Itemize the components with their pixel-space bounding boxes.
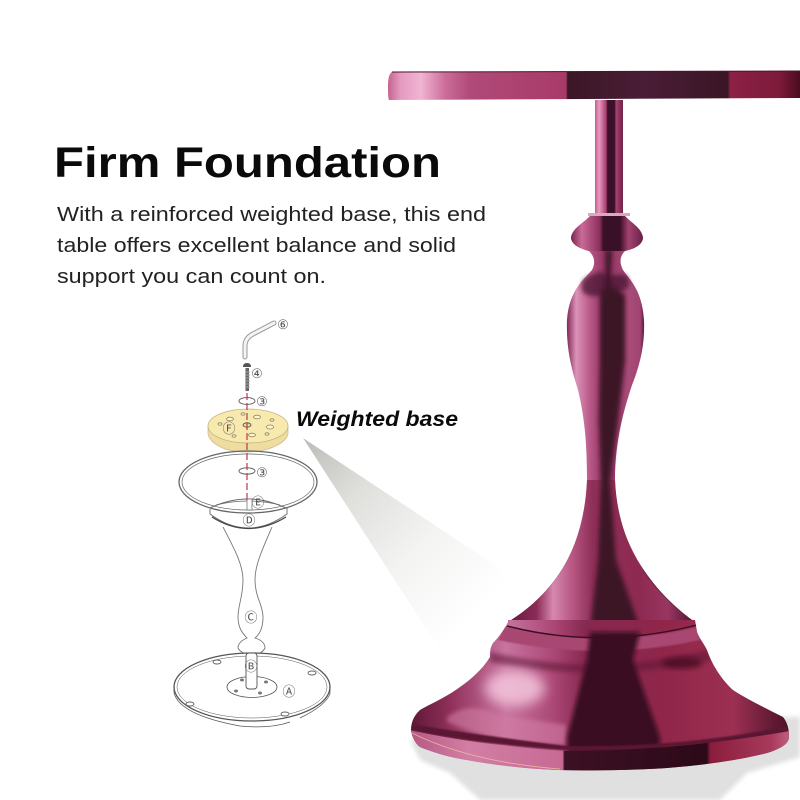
lower left bright band bbox=[447, 708, 566, 745]
central dark reflection bbox=[590, 250, 640, 632]
ground shadow under table bbox=[410, 717, 800, 800]
description text: With a reinforced weighted base, this end bbox=[57, 203, 486, 226]
lower washer bbox=[239, 468, 255, 474]
central dark reflection on base bbox=[567, 632, 660, 752]
rim bbox=[411, 730, 789, 770]
description text: support you can count on. bbox=[57, 265, 326, 288]
part labels: ⑥ bbox=[277, 317, 289, 332]
description text bbox=[57, 203, 486, 288]
ledge shading bbox=[490, 650, 712, 673]
part labels: Ⓒ bbox=[244, 610, 258, 625]
base bbox=[405, 615, 795, 775]
column body bbox=[508, 216, 695, 622]
collar bbox=[588, 213, 630, 216]
part labels: Ⓓ bbox=[242, 513, 256, 528]
top washer bbox=[239, 398, 255, 404]
stem bbox=[595, 100, 623, 216]
light beam from diagram to base bbox=[303, 438, 510, 650]
dark band above rim bbox=[412, 724, 788, 750]
bowl bbox=[179, 451, 317, 528]
upper lip bbox=[498, 626, 700, 651]
top edge line bbox=[392, 71, 800, 72]
description text: table offers excellent balance and solid bbox=[57, 234, 456, 257]
part labels: ④ bbox=[251, 366, 263, 381]
lip groove bbox=[507, 625, 697, 638]
flare cone bbox=[507, 480, 696, 626]
part labels: Ⓑ bbox=[244, 659, 258, 674]
table top bbox=[388, 71, 800, 100]
icon: allen key bbox=[245, 323, 274, 357]
icon: screw bbox=[243, 363, 251, 391]
base highlight bbox=[485, 670, 545, 706]
title: Firm Foundation bbox=[54, 139, 441, 187]
part labels: ③ bbox=[256, 394, 268, 409]
waist column bbox=[223, 527, 272, 654]
pedestal table bbox=[388, 71, 800, 775]
base plate bbox=[174, 653, 330, 727]
assembly diagram bbox=[174, 317, 330, 727]
part labels: ③ bbox=[256, 465, 268, 480]
part labels bbox=[222, 317, 296, 699]
neck shading bbox=[582, 272, 629, 296]
rim edge highlight bbox=[412, 733, 560, 769]
knob bbox=[571, 216, 643, 251]
part labels: Ⓕ bbox=[222, 421, 236, 436]
red assembly line bbox=[246, 393, 248, 500]
weighted disk bbox=[208, 409, 288, 452]
part labels: Ⓔ bbox=[251, 495, 265, 510]
dark reflection on right bbox=[662, 657, 702, 669]
weighted base label: Weighted base bbox=[296, 408, 458, 431]
part labels: Ⓐ bbox=[282, 684, 296, 699]
